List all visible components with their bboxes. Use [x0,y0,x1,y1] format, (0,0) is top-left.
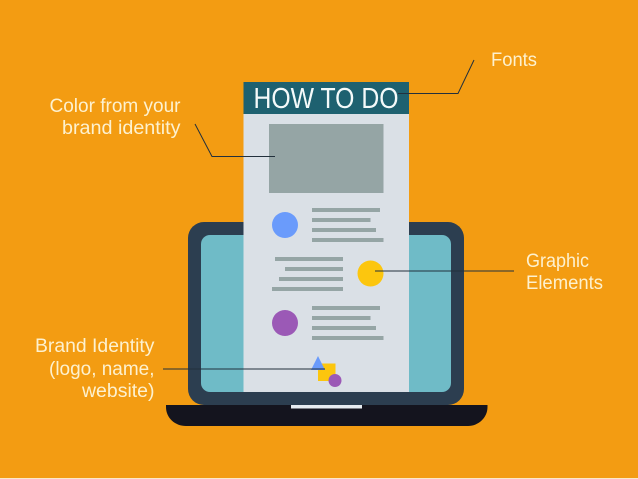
label: fonts: Fonts [491,50,537,71]
text row 3 [272,306,384,340]
poster document [244,82,409,392]
leader line: graphic elements [375,270,514,272]
label: brand identity [35,336,155,402]
leader line: color [195,124,275,156]
laptop [166,222,488,426]
label: brand identity: website) [81,381,154,402]
label: color from your brand identity: Color from your [50,96,181,117]
label: graphic elements [526,251,603,294]
label: color from your brand identity [50,96,181,139]
text row 2 [272,257,384,291]
label: brand identity: (logo, name, [49,359,154,380]
label: color from your brand identity: brand identity [62,118,181,139]
label: graphic elements: Graphic [526,251,589,272]
brand logo shapes [311,356,342,387]
poster header with title: HOW TO DO [254,83,398,115]
text row 1 [272,208,384,242]
label: graphic elements: Elements [526,273,603,294]
label: brand identity: Brand Identity [35,336,155,357]
leader line: fonts [398,60,474,94]
leader line: brand identity [163,368,325,370]
image placeholder [269,124,384,193]
